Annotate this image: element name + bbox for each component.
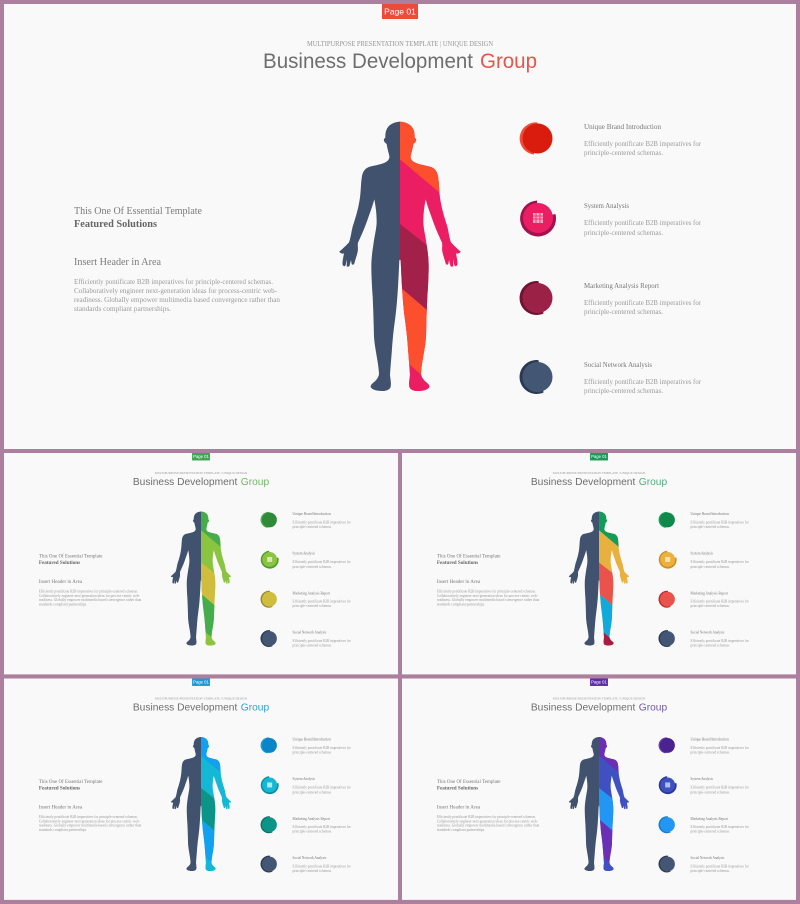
- item 4 text: principle-centered schemas.: [293, 644, 332, 648]
- icon: item 2: [261, 776, 279, 794]
- item 1 text: principle-centered schemas.: [584, 148, 663, 157]
- title: Business Development: [531, 477, 635, 488]
- left text block: [437, 778, 539, 832]
- left text block: Efficiently pontificate B2B imperatives for principle-centered schemas.: [39, 589, 138, 593]
- item 1 text: [691, 512, 749, 529]
- item 3 text: Marketing Analysis Report: [293, 591, 331, 595]
- left text block: This One Of Essential Template: [39, 778, 103, 785]
- item 2 text: [293, 777, 351, 794]
- left text block: This One Of Essential Template: [39, 552, 103, 559]
- subtitle: MULTIPURPOSE PRESENTATION TEMPLATE | UNIQUE DESIGN: [155, 696, 248, 700]
- item 4 text: Efficiently pontificate B2B imperatives for: [293, 865, 351, 869]
- page tab: Page 01: [193, 680, 210, 685]
- item 4 text: Social Network Analysis: [584, 360, 652, 369]
- item 2 text: System Analysis: [293, 777, 315, 781]
- item 1 text: [584, 122, 701, 157]
- item 3 text: [293, 817, 351, 834]
- item 3 text: [691, 817, 749, 834]
- page tab: [590, 453, 608, 460]
- left text block: standards compliant partnerships.: [74, 304, 171, 313]
- title: Business Development: [263, 50, 473, 73]
- item 1 text: principle-centered schemas.: [293, 751, 332, 755]
- icon: item 4: [658, 856, 675, 873]
- item 2 text: principle-centered schemas.: [691, 790, 730, 794]
- item 2 text: principle-centered schemas.: [691, 565, 730, 569]
- item 4 text: Social Network Analysis: [691, 631, 725, 635]
- item 3 text: Efficiently pontificate B2B imperatives for: [293, 825, 351, 829]
- item 3 text: [293, 591, 351, 608]
- title: Group: [241, 702, 269, 713]
- left text block: Collaboratively engineer next-generation ideas for process-centric web-: [437, 819, 539, 823]
- item 2 text: Efficiently pontificate B2B imperatives for: [293, 560, 351, 564]
- page tab: Page 01: [193, 454, 210, 459]
- item 3 text: Marketing Analysis Report: [293, 817, 331, 821]
- item 4 text: principle-centered schemas.: [584, 386, 663, 395]
- icon: item 2: [659, 776, 677, 794]
- panel: multicolour slide: [402, 453, 796, 674]
- icon: item 3: [520, 281, 552, 315]
- item 3 text: Efficiently pontificate B2B imperatives for: [293, 600, 351, 604]
- left text block: Efficiently pontificate B2B imperatives for principle-centered schemas.: [437, 589, 536, 593]
- item 4 text: principle-centered schemas.: [293, 869, 332, 873]
- title: Group: [639, 477, 667, 488]
- human body figure: [568, 737, 630, 871]
- item 4 text: Efficiently pontificate B2B imperatives for: [584, 377, 701, 386]
- item 4 text: Social Network Analysis: [293, 631, 327, 635]
- item 4 text: [293, 856, 351, 873]
- item 1 text: Unique Brand Introduction: [691, 738, 729, 742]
- left text block: Featured Solutions: [74, 219, 157, 230]
- icon: item 4: [658, 630, 675, 647]
- page tab: [192, 678, 210, 686]
- left text block: Featured Solutions: [39, 560, 80, 566]
- item 4 text: principle-centered schemas.: [691, 869, 730, 873]
- icon: item 1: [520, 122, 552, 154]
- item 1 text: principle-centered schemas.: [691, 751, 730, 755]
- title: Group: [639, 702, 667, 713]
- icon: item 1: [659, 737, 675, 753]
- item 1 text: Efficiently pontificate B2B imperatives for: [293, 521, 351, 525]
- item 2 text: Efficiently pontificate B2B imperatives for: [691, 785, 749, 789]
- subtitle: MULTIPURPOSE PRESENTATION TEMPLATE | UNIQUE DESIGN: [553, 471, 646, 475]
- item 4 text: Efficiently pontificate B2B imperatives for: [691, 865, 749, 869]
- left text block: Collaboratively engineer next-generation ideas for process-centric web-: [39, 594, 141, 598]
- item 4 text: principle-centered schemas.: [691, 644, 730, 648]
- icon: item 1: [659, 512, 675, 528]
- item 2 text: principle-centered schemas.: [293, 565, 332, 569]
- item 4 text: [691, 631, 749, 648]
- subtitle: MULTIPURPOSE PRESENTATION TEMPLATE | UNIQUE DESIGN: [155, 471, 248, 475]
- item 2 text: [691, 777, 749, 794]
- panel: main slide (Page 01, red): [4, 4, 796, 449]
- item 1 text: Efficiently pontificate B2B imperatives for: [293, 746, 351, 750]
- item 1 text: Unique Brand Introduction: [691, 512, 729, 516]
- item 2 text: [691, 551, 749, 569]
- item 4 text: Social Network Analysis: [293, 856, 327, 860]
- left text block: [74, 206, 280, 313]
- left text block: Insert Header in Area: [437, 804, 481, 810]
- left text block: [39, 778, 141, 832]
- left text block: Insert Header in Area: [39, 804, 83, 810]
- item 2 text: Efficiently pontificate B2B imperatives for: [584, 218, 701, 227]
- item 3 text: principle-centered schemas.: [691, 604, 730, 608]
- left text block: Insert Header in Area: [39, 579, 83, 585]
- item 1 text: [293, 512, 351, 529]
- item 3 text: principle-centered schemas.: [584, 307, 663, 316]
- item 1 text: Efficiently pontificate B2B imperatives for: [584, 139, 701, 148]
- left text block: Featured Solutions: [437, 785, 478, 791]
- item 1 text: principle-centered schemas.: [691, 525, 730, 529]
- item 3 text: Marketing Analysis Report: [691, 817, 729, 821]
- left text block: standards compliant partnerships.: [39, 603, 87, 607]
- item 2 text: [293, 551, 351, 569]
- title: Business Development: [133, 477, 237, 488]
- item 1 text: Unique Brand Introduction: [293, 738, 331, 742]
- item 3 text: principle-centered schemas.: [691, 830, 730, 834]
- item 4 text: Efficiently pontificate B2B imperatives for: [293, 639, 351, 643]
- item 3 text: Marketing Analysis Report: [691, 591, 729, 595]
- item 1 text: [293, 738, 351, 755]
- page tab: Page 01: [591, 680, 608, 685]
- item 2 text: principle-centered schemas.: [293, 790, 332, 794]
- title: Group: [480, 50, 537, 73]
- icon: item 1: [261, 737, 277, 753]
- item 2 text: [584, 201, 701, 237]
- left text block: readiness. Globally empower multimedia based convergence rather than: [74, 295, 280, 304]
- item 2 text: System Analysis: [691, 777, 713, 781]
- page tab: Page 01: [384, 6, 416, 16]
- left text block: Insert Header in Area: [437, 579, 481, 585]
- left text block: This One Of Essential Template: [437, 552, 501, 559]
- page tab: [590, 678, 608, 686]
- left text block: Collaboratively engineer next-generation ideas for process-centric web-: [74, 286, 277, 295]
- left text block: readiness. Globally empower multimedia based convergence rather than: [39, 824, 141, 828]
- title: Business Development: [531, 702, 635, 713]
- left text block: standards compliant partnerships.: [437, 828, 485, 832]
- left text block: This One Of Essential Template: [437, 778, 501, 785]
- icon: item 4: [520, 360, 552, 394]
- icon: item 1: [261, 512, 277, 528]
- item 4 text: [691, 856, 749, 873]
- item 1 text: Unique Brand Introduction: [293, 512, 331, 516]
- left text block: Featured Solutions: [39, 785, 80, 791]
- icon: item 2: [659, 551, 677, 569]
- left text block: [39, 552, 141, 607]
- item 2 text: Efficiently pontificate B2B imperatives for: [691, 560, 749, 564]
- item 3 text: Marketing Analysis Report: [584, 281, 660, 290]
- item 3 text: Efficiently pontificate B2B imperatives for: [691, 600, 749, 604]
- item 1 text: Efficiently pontificate B2B imperatives for: [691, 746, 749, 750]
- left text block: Efficiently pontificate B2B imperatives for principle-centered schemas.: [74, 277, 273, 286]
- item 1 text: Unique Brand Introduction: [584, 122, 661, 131]
- left text block: Collaboratively engineer next-generation ideas for process-centric web-: [437, 594, 539, 598]
- item 2 text: System Analysis: [584, 201, 629, 210]
- left text block: Collaboratively engineer next-generation ideas for process-centric web-: [39, 819, 141, 823]
- panel: blue slide: [4, 678, 398, 900]
- left text block: standards compliant partnerships.: [39, 828, 87, 832]
- item 2 text: System Analysis: [691, 551, 713, 555]
- left text block: Featured Solutions: [437, 560, 478, 566]
- panel: purple slide: [402, 678, 796, 900]
- left text block: This One Of Essential Template: [74, 206, 202, 217]
- item 3 text: Efficiently pontificate B2B imperatives for: [584, 298, 701, 307]
- item 4 text: Social Network Analysis: [691, 856, 725, 860]
- item 3 text: Efficiently pontificate B2B imperatives for: [691, 825, 749, 829]
- title: Group: [241, 477, 269, 488]
- item 1 text: Efficiently pontificate B2B imperatives for: [691, 521, 749, 525]
- page tab: Page 01: [591, 454, 608, 459]
- item 4 text: [584, 360, 701, 395]
- item 1 text: principle-centered schemas.: [293, 525, 332, 529]
- icon: item 2: [261, 551, 279, 569]
- human body figure: [170, 512, 232, 646]
- human body figure: [568, 512, 630, 646]
- human body figure: [339, 122, 461, 391]
- panel: green slide: [4, 453, 398, 674]
- left text block: Efficiently pontificate B2B imperatives for principle-centered schemas.: [437, 815, 536, 819]
- left text block: readiness. Globally empower multimedia based convergence rather than: [437, 598, 539, 602]
- item 1 text: [691, 738, 749, 755]
- item 2 text: System Analysis: [293, 551, 315, 555]
- item 4 text: [293, 631, 351, 648]
- title: Business Development: [133, 702, 237, 713]
- icon: item 3: [260, 591, 277, 608]
- left text block: standards compliant partnerships.: [437, 603, 485, 607]
- icon: item 3: [658, 816, 675, 833]
- human body figure: [170, 737, 232, 871]
- icon: item 2: [520, 200, 556, 236]
- left text block: readiness. Globally empower multimedia based convergence rather than: [39, 598, 141, 602]
- item 4 text: Efficiently pontificate B2B imperatives for: [691, 639, 749, 643]
- icon: item 4: [260, 856, 277, 873]
- subtitle: MULTIPURPOSE PRESENTATION TEMPLATE | UNIQUE DESIGN: [307, 40, 493, 48]
- left text block: [437, 552, 539, 607]
- item 3 text: [691, 591, 749, 608]
- page tab: [192, 453, 210, 460]
- item 3 text: [584, 281, 701, 316]
- left text block: readiness. Globally empower multimedia based convergence rather than: [437, 824, 539, 828]
- item 2 text: Efficiently pontificate B2B imperatives for: [293, 785, 351, 789]
- subtitle: MULTIPURPOSE PRESENTATION TEMPLATE | UNIQUE DESIGN: [553, 696, 646, 700]
- item 3 text: principle-centered schemas.: [293, 830, 332, 834]
- icon: item 4: [260, 630, 277, 647]
- left text block: Insert Header in Area: [74, 257, 161, 268]
- icon: item 3: [260, 816, 277, 833]
- item 2 text: principle-centered schemas.: [584, 228, 663, 237]
- page tab: [382, 4, 418, 19]
- item 3 text: principle-centered schemas.: [293, 604, 332, 608]
- left text block: Efficiently pontificate B2B imperatives for principle-centered schemas.: [39, 815, 138, 819]
- icon: item 3: [658, 591, 675, 608]
